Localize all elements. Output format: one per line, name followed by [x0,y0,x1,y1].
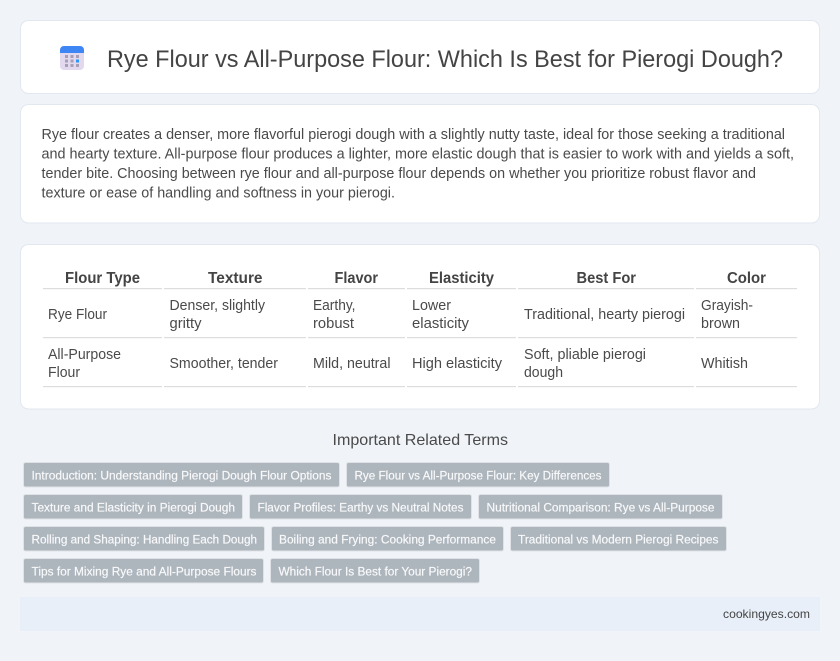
tag list: related terms [24,462,726,583]
table row: rye flour: Denser, slightly [170,298,266,314]
icon: calendar [60,46,84,70]
tag list: related terms: Texture and Elasticity in Pierogi Dough [32,500,235,514]
panel: header [20,20,820,94]
table header row: Flavor [334,270,378,287]
table row: all-purpose flour: Mild, neutral [313,356,390,372]
tag list: related terms: Nutritional Comparison: Rye vs All-Purpose [486,500,715,514]
tag list: related terms: Which Flour Is Best for Your Pierogi? [278,564,472,578]
table row: all-purpose flour: Soft, pliable pierogi [524,347,646,363]
table row: rye flour: gritty [170,316,202,332]
table header row [65,270,766,287]
table row: all-purpose flour: Whitish [701,356,748,372]
table row: rye flour: Rye Flour [48,307,107,323]
table header row: Best For [576,270,636,287]
table header row: Flour Type [65,270,140,287]
tag list: related terms: Introduction: Understanding Pierogi Dough Flour Options [32,468,332,482]
tag list: related terms: Boiling and Frying: Cooking Performance [279,532,496,546]
table row: all-purpose flour: dough [524,365,563,381]
panel: introduction [20,104,820,223]
table row: rye flour: robust [313,316,354,332]
table header row: Elasticity [429,270,494,287]
text block: summary paragraph: tender bite. Choosing between rye flour and all-purpose flour depends on whether you prioritize robust flavor and [42,166,756,182]
text block: summary paragraph: Rye flour creates a denser, more flavorful pierogi dough with a slightly nutty taste, ideal for those seeking a traditional [42,127,785,143]
table row: rye flour: Lower [412,298,451,314]
table header row: Color [727,270,766,287]
footer: cookingyes.com [723,607,810,621]
table row: rye flour: Grayish- [701,298,753,314]
table row: all-purpose flour: Smoother, tender [170,356,278,372]
table row: rye flour: elasticity [412,316,470,332]
tag list: related terms: Tips for Mixing Rye and All-Purpose Flours [32,564,256,578]
tag list: related terms: Flavor Profiles: Earthy vs Neutral Notes [258,500,464,514]
table row: all-purpose flour: Flour [48,365,80,381]
tag list: related terms: Rolling and Shaping: Handling Each Dough [32,532,257,546]
text block: summary paragraph: and hearty texture. All-purpose flour produces a lighter, more elastic dough that is easier to work with and yields a soft, [42,146,794,162]
title: Rye Flour vs All-Purpose Flour: Which Is Best for Pierogi Dough? [107,46,783,73]
footer [20,597,820,631]
table row: all-purpose flour: High elasticity [412,356,503,372]
tag list: related terms: Traditional vs Modern Pierogi Recipes [518,532,718,546]
table header row: Texture [208,270,263,287]
table row: rye flour: Earthy, [313,298,356,314]
text block: summary paragraph [42,127,794,202]
heading: related terms: Important Related Terms [332,432,508,449]
tag list: related terms: Rye Flour vs All-Purpose Flour: Key Differences [354,468,602,482]
text block: summary paragraph: texture or ease of handling and softness in your pierogi. [42,186,395,202]
table row: rye flour [48,298,753,332]
table row: all-purpose flour: All-Purpose [48,347,121,363]
panel: comparison table [20,244,820,409]
table row: rye flour: Traditional, hearty pierogi [524,307,685,323]
table row: rye flour: brown [701,316,740,332]
table row: all-purpose flour [48,347,748,381]
